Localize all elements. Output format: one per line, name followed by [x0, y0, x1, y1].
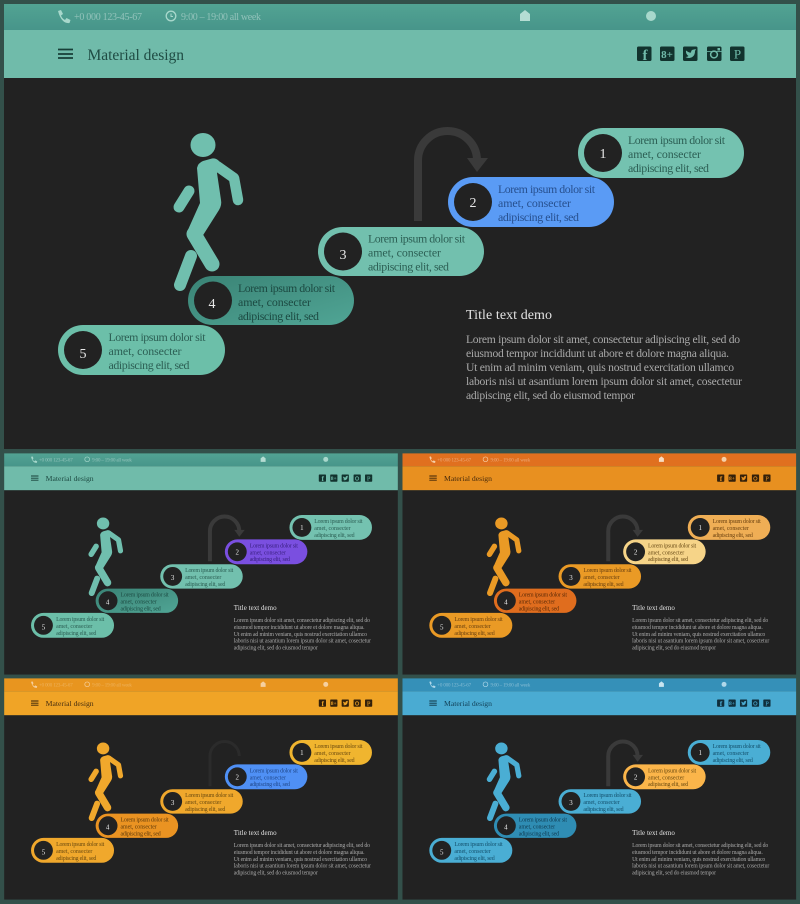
panel: small slide amber and blue — [4, 678, 398, 900]
panel: small slide orange and cream: 3 — [569, 574, 573, 582]
panel: small slide orange and cream: Title text demo — [632, 604, 675, 612]
panel: small slide orange and cream: adipiscing elit, sed do eiusmod tempor — [632, 646, 716, 652]
panel: small slide blue and orange: Lorem ipsum dolor sit amet, consectetur adipiscing elit, sed do — [632, 843, 768, 849]
panel: small slide amber and blue: eiusmod tempor incididunt ut abore et dolore magna aliqua. — [234, 850, 365, 856]
panel: small slide orange and cream: Lorem ipsum dolor sit amet, consectetur adipiscing elit, sed do — [632, 618, 768, 624]
panel: small slide amber and blue: adipiscing elit, sed do eiusmod tempor — [234, 871, 318, 877]
panel: small slide blue and orange: Ut enim ad minim veniam, quis nostrud exercitation ullamco — [632, 857, 765, 863]
panel: small slide teal and purple: adipiscing elit, sed do eiusmod tempor — [234, 646, 318, 652]
panel: small slide amber and blue: amet, consecter — [314, 751, 351, 757]
panel: small slide orange and cream: amet, consecter — [454, 624, 491, 630]
panel: small slide teal and purple: amet, consecter — [250, 550, 286, 556]
panel: small slide teal and purple: Material design — [46, 474, 94, 483]
step 3: amet, consecter — [368, 246, 441, 260]
panel: small slide amber and blue: 9:00 – 19:00 all week — [92, 683, 132, 688]
panel: small slide blue and orange: adipiscing elit, sed — [583, 807, 624, 813]
panel: small slide blue and orange: Material design — [444, 699, 492, 708]
panel: small slide teal and purple: 3 — [171, 574, 175, 582]
panel: small slide orange and cream: 9:00 – 19:00 all week — [490, 458, 531, 463]
panel: small slide teal and purple: 5 — [42, 623, 46, 631]
panel: small slide blue and orange: Lorem ipsum dolor sit — [648, 768, 697, 774]
panel: small slide amber and blue: amet, consecter — [185, 800, 221, 806]
panel: small slide blue and orange: 3 — [569, 799, 573, 807]
panel: small slide amber and blue: +0 000 123-45-67 — [39, 683, 73, 688]
panel: small slide amber and blue: Lorem ipsum dolor sit — [314, 744, 363, 750]
panel: small slide orange and cream: 5 — [440, 623, 444, 631]
panel: small slide blue and orange: adipiscing elit, sed — [519, 831, 559, 837]
panel: small slide teal and purple: P — [367, 475, 371, 482]
panel: small slide orange and cream: amet, consecter — [713, 526, 749, 532]
arrow — [418, 131, 488, 221]
step 3 — [318, 227, 484, 276]
panel: small slide blue and orange: 4 — [504, 823, 508, 831]
step 2: amet, consecter — [498, 196, 571, 210]
panel: small slide teal and purple: amet, consecter — [56, 624, 92, 630]
panel: small slide amber and blue: 3 — [171, 799, 175, 807]
panel: small slide orange and cream: adipiscing elit, sed — [519, 606, 559, 612]
panel: small slide teal and purple: Title text demo — [234, 604, 277, 612]
step 4 — [188, 276, 354, 325]
panel: small slide orange and cream: 4 — [504, 598, 508, 606]
social icons: P — [734, 46, 741, 62]
icon: walking person — [179, 133, 238, 285]
panel: small slide orange and cream — [402, 453, 796, 675]
step 2: Lorem ipsum dolor sit — [498, 182, 596, 196]
top contact bar: +0 000 123-45-67 — [74, 12, 142, 23]
panel: small slide orange and cream: adipiscing elit, sed — [454, 631, 495, 637]
panel: small slide blue and orange — [402, 678, 796, 900]
panel: small slide orange and cream: Lorem ipsum dolor sit — [648, 543, 697, 549]
panel: small slide orange and cream: adipiscing elit, sed — [648, 557, 688, 563]
text block: Title text demo — [466, 308, 552, 323]
panel: small slide teal and purple: adipiscing elit, sed — [120, 606, 161, 612]
panel: small slide teal and purple: 4 — [106, 598, 110, 606]
step 3: 3 — [340, 248, 346, 263]
panel: small slide blue and orange: Title text demo — [632, 829, 675, 837]
text block — [466, 308, 742, 402]
panel: small slide amber and blue: adipiscing elit, sed — [314, 758, 355, 764]
panel: small slide orange and cream: adipiscing elit, sed — [713, 533, 753, 539]
step 5: Lorem ipsum dolor sit — [108, 330, 206, 344]
step 3: Lorem ipsum dolor sit — [368, 232, 466, 246]
panel: small slide teal and purple: 8+ — [331, 476, 337, 482]
panel: small slide blue and orange: 2 — [634, 773, 638, 781]
panel: small slide teal and purple: Lorem ipsum dolor sit — [314, 519, 363, 525]
panel: small slide blue and orange: laboris nisi ut asantium lorem ipsum dolor sit amet, cosectetur — [632, 864, 769, 870]
panel: small slide blue and orange: amet, consecter — [583, 800, 620, 806]
step 5 — [58, 325, 225, 375]
step 2 — [448, 177, 614, 227]
panel: small slide amber and blue: amet, consecter — [120, 824, 157, 830]
step 4: adipiscing elit, sed — [238, 309, 319, 323]
panel: small slide teal and purple: f — [322, 474, 325, 483]
panel: small slide amber and blue: adipiscing elit, sed — [56, 856, 96, 862]
panel: small slide teal and purple: eiusmod tempor incididunt ut abore et dolore magna aliqua. — [234, 625, 365, 631]
panel: small slide blue and orange: Lorem ipsum dolor sit — [454, 842, 503, 848]
step 4: 4 — [208, 297, 216, 312]
step 3: adipiscing elit, sed — [368, 260, 449, 274]
text block: adipiscing elit, sed do eiusmod tempor — [466, 389, 635, 402]
panel: small slide blue and orange: +0 000 123-45-67 — [437, 683, 472, 688]
social icons: f — [642, 48, 648, 64]
step 4: amet, consecter — [238, 295, 311, 309]
panel: small slide teal and purple: 9:00 – 19:00 all week — [92, 458, 132, 463]
panel: small slide amber and blue: 2 — [236, 773, 240, 781]
panel: small slide amber and blue: P — [367, 700, 371, 707]
panel: small slide teal and purple: amet, consecter — [314, 526, 351, 532]
panel: small slide teal and purple: +0 000 123-45-67 — [39, 458, 73, 463]
panel: small slide orange and cream: laboris nisi ut asantium lorem ipsum dolor sit amet, cosectetur — [632, 639, 769, 645]
panel: small slide amber and blue: 1 — [300, 749, 304, 757]
panel: small slide amber and blue: adipiscing elit, sed — [120, 831, 161, 837]
panel: small slide blue and orange: adipiscing elit, sed — [648, 782, 688, 788]
step 2: 2 — [470, 196, 476, 211]
panel: small slide blue and orange: 5 — [440, 848, 444, 856]
panel: small slide amber and blue: f — [322, 699, 325, 708]
panel: small slide orange and cream: P — [765, 475, 769, 482]
panel: small slide teal and purple: 2 — [236, 548, 240, 556]
panel: small slide teal and purple: Lorem ipsum dolor sit — [185, 568, 234, 574]
panel: small slide amber and blue: Lorem ipsum dolor sit — [120, 818, 169, 824]
panel: small slide teal and purple — [4, 453, 398, 675]
panel: small slide teal and purple: Lorem ipsum dolor sit — [120, 593, 169, 599]
top contact bar: 9:00 – 19:00 all week — [181, 12, 261, 23]
step 1: adipiscing elit, sed — [628, 161, 709, 175]
step 5: amet, consecter — [108, 344, 182, 358]
panel: small slide orange and cream: Lorem ipsum dolor sit — [583, 568, 632, 574]
panel: small slide amber and blue: 5 — [42, 848, 46, 856]
panel: small slide orange and cream: amet, consecter — [648, 550, 684, 556]
panel: small slide orange and cream: Material design — [444, 474, 492, 483]
panel: small slide amber and blue: Ut enim ad minim veniam, quis nostrud exercitation ullamco — [234, 857, 367, 863]
panel: small slide amber and blue: 8+ — [331, 701, 337, 707]
top contact bar — [4, 4, 796, 30]
text block: Ut enim ad minim veniam, quis nostrud exercitation ullamco — [466, 361, 734, 374]
panel: small slide amber and blue: Lorem ipsum dolor sit — [250, 768, 298, 774]
step 1 — [578, 128, 744, 178]
panel: small slide orange and cream: Lorem ipsum dolor sit — [519, 593, 567, 599]
social icons — [637, 46, 744, 64]
panel: small slide orange and cream: Ut enim ad minim veniam, quis nostrud exercitation ullamco — [632, 632, 765, 638]
panel: small slide orange and cream: +0 000 123-45-67 — [437, 458, 472, 463]
panel: small slide amber and blue: Material design — [46, 699, 94, 708]
text block: eiusmod tempor incididunt ut abore et dolore magna aliqua. — [466, 347, 729, 360]
panel: small slide blue and orange: Lorem ipsum dolor sit — [713, 744, 761, 750]
panel: small slide teal and purple: laboris nisi ut asantium lorem ipsum dolor sit amet, cosectetur — [234, 639, 371, 645]
panel: small slide orange and cream: Lorem ipsum dolor sit — [713, 519, 761, 525]
panel: small slide teal and purple: amet, consecter — [120, 599, 157, 605]
panel: small slide orange and cream: 8+ — [729, 476, 735, 482]
panel: small slide amber and blue: amet, consecter — [250, 775, 286, 781]
navigation bar — [4, 30, 796, 78]
panel: small slide orange and cream: 1 — [698, 524, 702, 532]
text block: laboris nisi ut asantium lorem ipsum dolor sit amet, cosectetur — [466, 375, 742, 388]
panel: small slide blue and orange: 9:00 – 19:00 all week — [490, 683, 531, 688]
panel: small slide blue and orange: amet, consecter — [648, 775, 684, 781]
step 1: amet, consecter — [628, 147, 701, 161]
icon: menu — [58, 50, 73, 58]
panel: small slide teal and purple: Lorem ipsum dolor sit amet, consectetur adipiscing elit, sed do — [234, 618, 370, 624]
step 1: Lorem ipsum dolor sit — [628, 133, 726, 147]
navigation bar: Material design — [88, 47, 184, 64]
step 2: adipiscing elit, sed — [498, 210, 579, 224]
panel: small slide blue and orange: eiusmod tempor incididunt ut abore et dolore magna aliqua. — [632, 850, 763, 856]
panel: small slide blue and orange: amet, consecter — [713, 751, 749, 757]
panel: small slide orange and cream: f — [720, 474, 723, 483]
panel: small slide orange and cream: Lorem ipsum dolor sit — [454, 617, 503, 623]
panel: small slide blue and orange: P — [765, 700, 769, 707]
step 1: 1 — [600, 147, 606, 162]
panel: small slide amber and blue: adipiscing elit, sed — [185, 807, 225, 813]
panel: small slide orange and cream: amet, consecter — [583, 575, 620, 581]
panel: small slide teal and purple: Lorem ipsum dolor sit — [250, 543, 298, 549]
panel: small slide teal and purple: adipiscing elit, sed — [314, 533, 355, 539]
panel: small slide orange and cream: amet, consecter — [519, 599, 555, 605]
panel: small slide teal and purple: adipiscing elit, sed — [185, 582, 225, 588]
panel: small slide teal and purple: adipiscing elit, sed — [56, 631, 96, 637]
panel: small slide teal and purple: Lorem ipsum dolor sit — [56, 617, 105, 623]
panel: small slide teal and purple: amet, consecter — [185, 575, 221, 581]
panel: small slide amber and blue: adipiscing elit, sed — [250, 782, 290, 788]
panel: small slide teal and purple: 1 — [300, 524, 304, 532]
step 5: adipiscing elit, sed — [108, 358, 190, 372]
panel: small slide amber and blue: Title text demo — [234, 829, 277, 837]
panel: small slide teal and purple: Ut enim ad minim veniam, quis nostrud exercitation ullamco — [234, 632, 367, 638]
social icons: 8+ — [661, 49, 673, 61]
step 5: 5 — [80, 347, 86, 362]
panel: small slide amber and blue: amet, consecter — [56, 849, 92, 855]
panel: small slide blue and orange: adipiscing elit, sed — [454, 856, 495, 862]
panel: small slide blue and orange: adipiscing elit, sed do eiusmod tempor — [632, 871, 716, 877]
panel: small slide blue and orange: Lorem ipsum dolor sit — [583, 793, 632, 799]
panel: small slide blue and orange: amet, consecter — [519, 824, 555, 830]
step 4: Lorem ipsum dolor sit — [238, 281, 336, 295]
panel: small slide orange and cream: eiusmod tempor incididunt ut abore et dolore magna aliqua. — [632, 625, 763, 631]
panel: small slide orange and cream: adipiscing elit, sed — [583, 582, 624, 588]
panel: small slide blue and orange: Lorem ipsum dolor sit — [519, 818, 567, 824]
panel: small slide amber and blue: 4 — [106, 823, 110, 831]
panel: small slide teal and purple: adipiscing elit, sed — [250, 557, 290, 563]
panel: main slide, teal and blue — [4, 4, 796, 449]
panel: small slide blue and orange: adipiscing elit, sed — [713, 758, 753, 764]
panel: small slide blue and orange: 8+ — [729, 701, 735, 707]
panel: small slide blue and orange: 1 — [698, 749, 702, 757]
panel: small slide amber and blue: Lorem ipsum dolor sit — [56, 842, 105, 848]
panel: small slide blue and orange: amet, consecter — [454, 849, 491, 855]
panel: small slide blue and orange: f — [720, 699, 723, 708]
panel: small slide amber and blue: laboris nisi ut asantium lorem ipsum dolor sit amet, cosectetur — [234, 864, 371, 870]
panel: small slide orange and cream: 2 — [634, 548, 638, 556]
text block: Lorem ipsum dolor sit amet, consectetur adipiscing elit, sed do — [466, 333, 740, 346]
panel: small slide amber and blue: Lorem ipsum dolor sit amet, consectetur adipiscing elit, sed do — [234, 843, 370, 849]
panel: small slide amber and blue: Lorem ipsum dolor sit — [185, 793, 234, 799]
